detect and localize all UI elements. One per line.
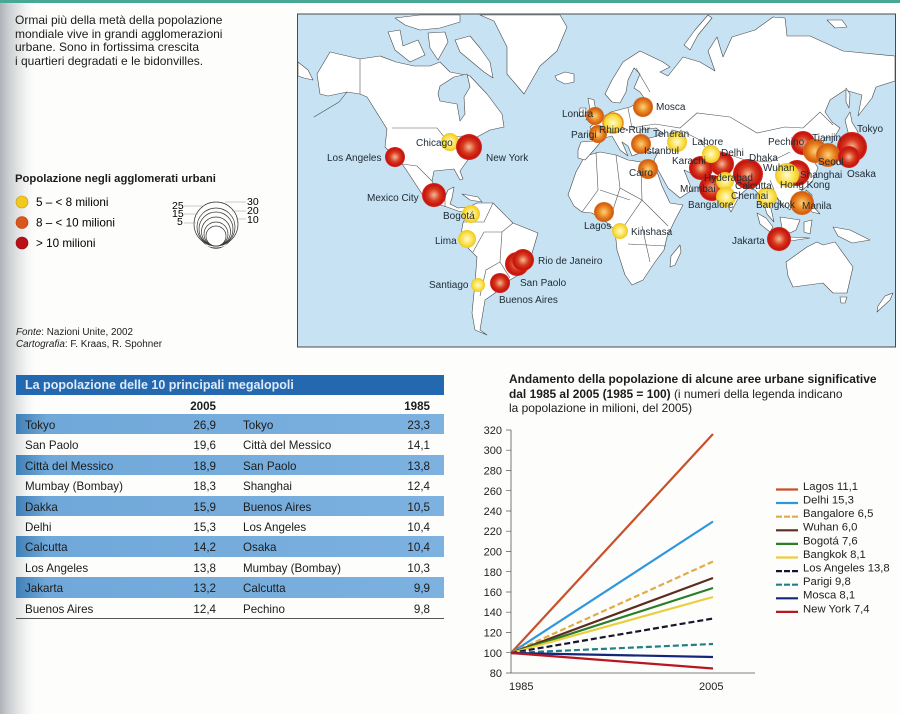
population table: Pechino — [243, 603, 285, 616]
city labels: Wuhan — [763, 163, 795, 174]
source credits: Cartografia: F. Kraas, R. Spohner — [16, 339, 162, 350]
chart legend: Lagos 11,1 — [803, 481, 858, 493]
proportional circles scale: 15 — [172, 208, 184, 220]
population table: Tokyo — [25, 419, 55, 432]
population table: Buenos Aires — [25, 603, 93, 616]
city labels: Seoul — [818, 157, 844, 168]
chart legend: New York 7,4 — [803, 603, 870, 615]
population table: Mumbay (Bombay) — [25, 480, 123, 493]
source credits: Fonte: Nazioni Unite, 2002 — [16, 327, 133, 338]
chart legend: Bangalore 6,5 — [803, 508, 873, 520]
chart legend: Bogotá 7,6 — [803, 535, 858, 547]
legend heading: Popolazione negli agglomerati urbani — [15, 173, 216, 185]
city labels: New York — [486, 153, 529, 164]
population table: Mumbay (Bombay) — [243, 562, 341, 575]
city labels: Manila — [802, 201, 832, 212]
axes: 160 — [484, 587, 502, 599]
city labels: Calcutta — [735, 181, 772, 192]
population table: 18,3 — [193, 480, 216, 493]
population table: Buenos Aires — [243, 501, 311, 514]
population table: San Paolo — [243, 460, 297, 473]
population table: 10,3 — [407, 562, 430, 575]
city labels: Jakarta — [732, 236, 765, 247]
city labels: Tokyo — [857, 124, 884, 135]
chart title — [509, 372, 876, 415]
city labels: Teheran — [653, 129, 689, 140]
proportional circles scale: 5 — [177, 216, 183, 228]
city labels: Tianjin — [812, 133, 841, 144]
population table — [16, 400, 444, 619]
population table: 13,2 — [193, 582, 216, 595]
line chart — [484, 425, 890, 693]
axes: 320 — [484, 425, 502, 437]
city labels: San Paolo — [520, 278, 567, 289]
population table: Tokyo — [243, 419, 273, 432]
world map — [297, 14, 896, 348]
axes: 240 — [484, 506, 502, 518]
chart title: la popolazione in milioni, del 2005) — [509, 401, 692, 415]
axes — [484, 425, 755, 693]
city labels: Karachi — [672, 156, 706, 167]
population table: Delhi — [25, 521, 51, 534]
population table: Jakarta — [25, 582, 63, 595]
city labels: Cairo — [629, 168, 653, 179]
city labels: Rhine-Ruhr — [599, 125, 651, 136]
city labels: Los Angeles — [327, 153, 382, 164]
axes: 300 — [484, 445, 502, 457]
population table: Dakka — [25, 501, 58, 514]
table heading: La popolazione delle 10 principali megalopoli — [25, 378, 294, 392]
australia — [786, 242, 893, 312]
population table: Los Angeles — [243, 521, 306, 534]
population table: Città del Messico — [25, 460, 113, 473]
chart title: dal 1985 al 2005 (1985 = 100) (i numeri della legenda indicano — [509, 386, 843, 400]
chart legend: Parigi 9,8 — [803, 576, 851, 588]
city labels — [327, 102, 884, 306]
population table: 14,1 — [407, 439, 430, 452]
axes: 280 — [484, 466, 502, 478]
panel: map legend — [15, 173, 259, 250]
city labels: Mosca — [656, 102, 686, 113]
arctic islands — [298, 15, 493, 80]
uk and ireland — [579, 98, 598, 120]
proportional circles scale: 10 — [247, 214, 259, 226]
population table: 23,3 — [407, 419, 430, 432]
city labels: Pechino — [768, 137, 805, 148]
population table: Calcutta — [243, 582, 286, 595]
city labels: Bangkok — [756, 200, 796, 211]
city labels: Bogotá — [443, 211, 475, 222]
proportional circles scale — [172, 197, 259, 249]
intro text: mondiale vive in grandi agglomerazioni — [15, 27, 222, 41]
japan and sakhalin — [836, 88, 858, 165]
iceland — [555, 72, 574, 84]
chart legend: Delhi 15,3 — [803, 494, 854, 506]
population table: 10,4 — [407, 541, 430, 554]
city labels: Hyderabad — [704, 173, 753, 184]
city labels: Londra — [562, 109, 594, 120]
intro text — [15, 13, 222, 68]
proportional circles scale: 20 — [247, 205, 259, 217]
proportional circles scale: 25 — [172, 200, 184, 212]
population table: 9,8 — [414, 603, 430, 616]
city labels: Lima — [435, 236, 457, 247]
south america — [460, 203, 538, 335]
axes: 180 — [484, 567, 502, 579]
population table: 10,4 — [407, 521, 430, 534]
chart legend: Wuhan 6,0 — [803, 522, 857, 534]
hudson bay — [438, 74, 470, 121]
population table: 14,2 — [193, 541, 216, 554]
population table: 13,8 — [407, 460, 430, 473]
table heading — [16, 375, 444, 395]
population table: 10,5 — [407, 501, 430, 514]
city labels: Istanbul — [644, 146, 679, 157]
city labels: Parigi — [571, 130, 597, 141]
population table: 13,8 — [193, 562, 216, 575]
city labels: Chicago — [416, 138, 453, 149]
population table: 15,9 — [193, 501, 216, 514]
population table: Los Angeles — [25, 562, 88, 575]
city labels: Osaka — [847, 169, 876, 180]
population table: 19,6 — [193, 439, 216, 452]
year headers: 2005 — [190, 400, 216, 413]
axes: 220 — [484, 526, 502, 538]
population table: 15,3 — [193, 521, 216, 534]
city labels: Delhi — [721, 148, 744, 159]
axes: 1985 — [509, 681, 533, 693]
population table: Città del Messico — [243, 439, 331, 452]
population table: San Paolo — [25, 439, 79, 452]
city labels: Hong Kong — [780, 180, 830, 191]
colour key — [16, 196, 115, 250]
axes: 260 — [484, 486, 502, 498]
year headers — [190, 400, 430, 413]
axes: 2005 — [699, 681, 723, 693]
city labels: Lahore — [692, 137, 724, 148]
year headers: 1985 — [404, 400, 430, 413]
greenland — [480, 15, 567, 94]
axes: 100 — [484, 648, 502, 660]
population table: Osaka — [243, 541, 277, 554]
population table: Shanghai — [243, 480, 292, 493]
axes: 200 — [484, 546, 502, 558]
city labels: Buenos Aires — [499, 295, 558, 306]
southeast asia islands — [757, 190, 870, 243]
city labels: Santiago — [429, 280, 469, 291]
cuba — [462, 194, 482, 202]
intro text: urbane. Sono in fortissima crescita — [15, 40, 199, 54]
city labels: Lagos — [584, 221, 611, 232]
population table: 9,9 — [414, 582, 430, 595]
chart legend — [776, 481, 890, 615]
colour key: 5 – < 8 milioni — [36, 196, 108, 209]
axes: 80 — [490, 668, 502, 680]
africa — [568, 152, 683, 285]
colour key: > 10 milioni — [36, 237, 95, 250]
chart legend: Bangkok 8,1 — [803, 549, 866, 561]
population table: 12,4 — [193, 603, 216, 616]
city labels: Shanghai — [800, 170, 842, 181]
eurasia — [578, 17, 895, 222]
inland seas — [640, 128, 680, 146]
north america — [314, 52, 504, 213]
data lines — [511, 434, 713, 668]
intro text: Ormai più della metà della popolazione — [15, 13, 222, 27]
source credits — [16, 327, 162, 350]
chart title: Andamento della popolazione di alcune aree urbane significative — [509, 372, 876, 386]
colour key: 8 – < 10 milioni — [36, 216, 115, 230]
city labels: Chennai — [731, 191, 768, 202]
chart legend: Los Angeles 13,8 — [803, 562, 890, 574]
chart legend: Mosca 8,1 — [803, 590, 855, 602]
population table: 26,9 — [193, 419, 216, 432]
city labels: Mexico City — [367, 193, 419, 204]
population table: Calcutta — [25, 541, 68, 554]
city labels: Bangalore — [688, 200, 734, 211]
city markers — [385, 97, 867, 293]
population table: 18,9 — [193, 460, 216, 473]
city labels: Kinshasa — [631, 227, 673, 238]
madagascar — [670, 245, 681, 267]
axes: 120 — [484, 628, 502, 640]
axes: 140 — [484, 607, 502, 619]
intro text: i quartieri degradati e le bidonvilles. — [15, 54, 203, 68]
population table: 12,4 — [407, 480, 430, 493]
city labels: Dhaka — [749, 153, 778, 164]
city labels: Rio de Janeiro — [538, 256, 603, 267]
national borders — [360, 59, 833, 296]
arctic russia islands — [684, 15, 847, 50]
city labels: Mumbai — [680, 184, 716, 195]
